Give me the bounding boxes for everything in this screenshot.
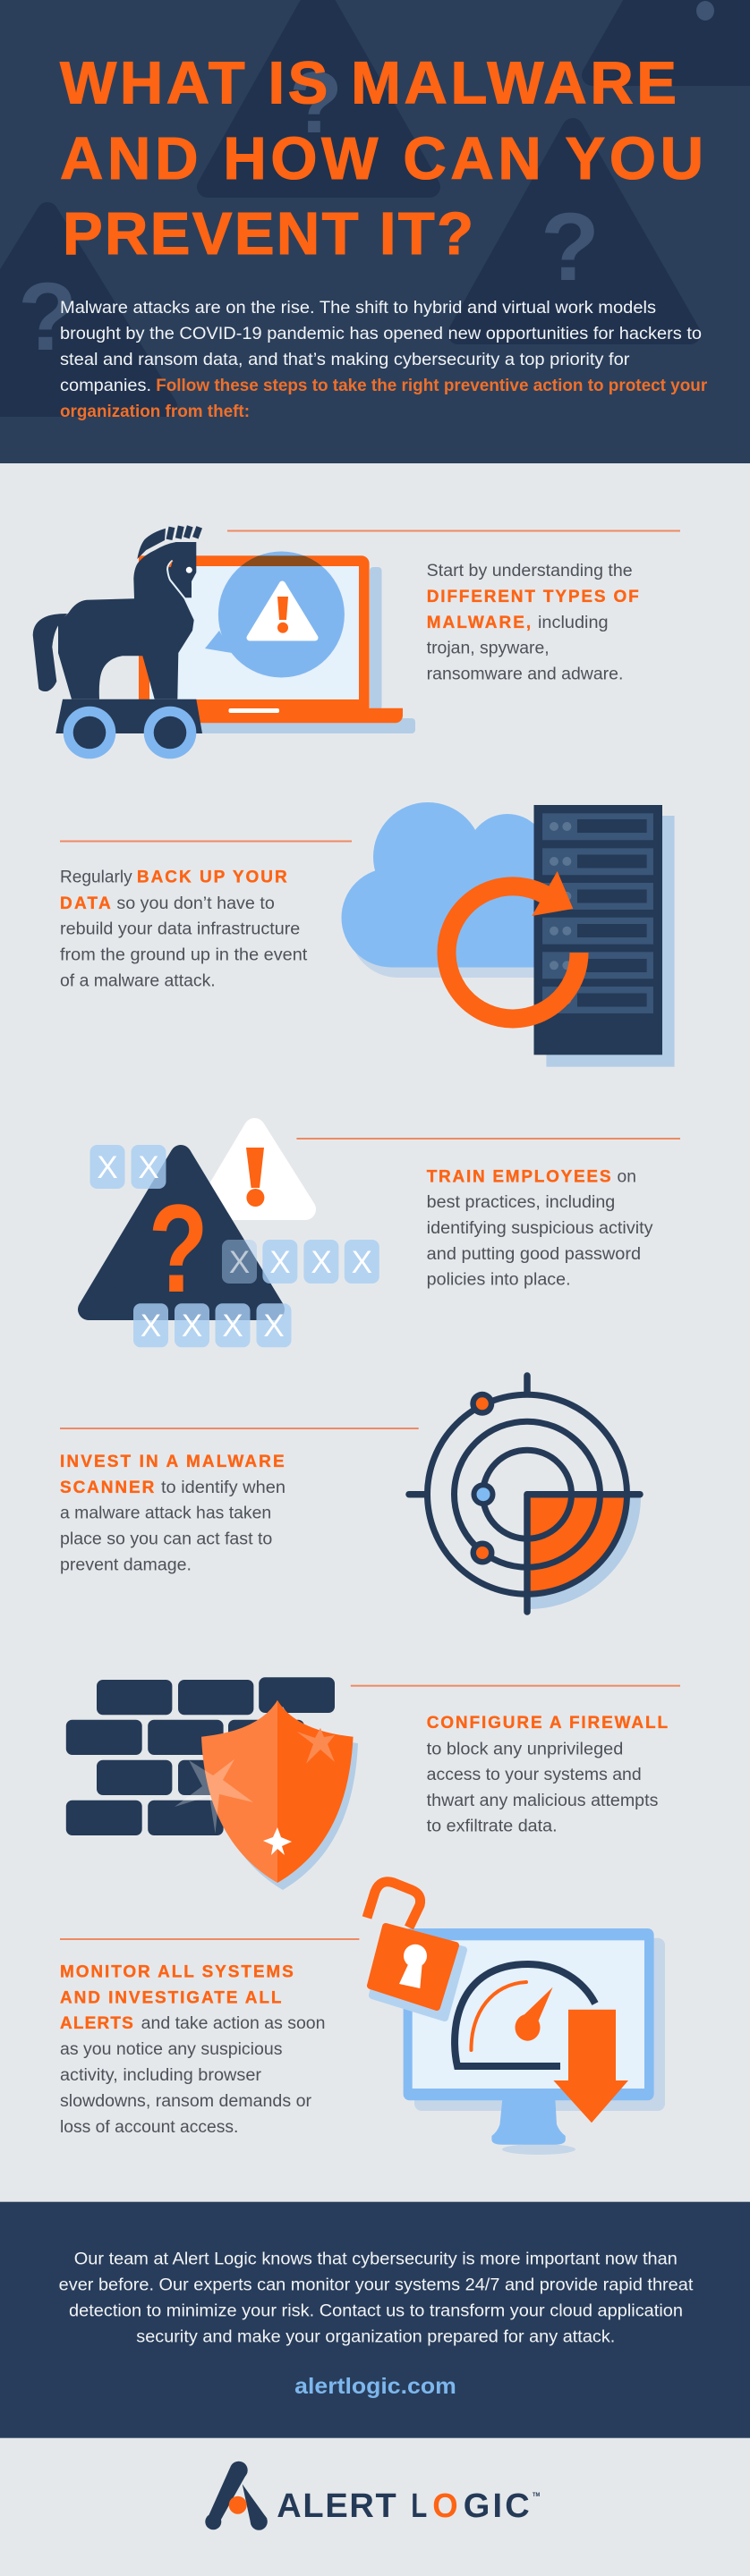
panel: call to action footer band xyxy=(0,2202,750,2438)
text: step 6: loss of account access. xyxy=(60,2118,238,2137)
text: step 3: and putting good password xyxy=(427,1245,641,1264)
icon: warning triangles with password tiles xyxy=(89,1129,379,1347)
text: step 2: DATA xyxy=(60,894,111,913)
text: step 4: prevent damage. xyxy=(60,1556,192,1575)
text: step 6: as you notice any suspicious xyxy=(60,2040,283,2059)
icon: monitor with gauge xyxy=(404,1928,665,2155)
icon: warning triangles with password tiles: X xyxy=(138,1150,159,1185)
title: PREVENT IT? xyxy=(63,200,473,267)
text: step 5 xyxy=(427,1714,668,1836)
panel: step 6 monitor all systems xyxy=(60,1882,665,2155)
logo: Alert Logic xyxy=(205,2462,540,2530)
text: step 4 xyxy=(60,1453,286,1575)
icon: warning triangles with password tiles: X xyxy=(222,1309,243,1343)
panel: header xyxy=(0,0,750,463)
text: closing paragraph: ever before. Our experts can monitor your systems 24/7 and provide rapid threat xyxy=(59,2275,694,2295)
text: step 4: place so you can act fast to xyxy=(60,1530,272,1549)
text: step 1: trojan, spyware, xyxy=(427,640,550,658)
text: step 1 xyxy=(427,562,639,683)
panel: step 5 firewall xyxy=(66,1677,680,1890)
text: step 3: TRAIN EMPLOYEES xyxy=(427,1167,610,1186)
icon: warning triangles with password tiles: X xyxy=(141,1309,161,1343)
panel: step 1 different types of malware xyxy=(33,526,680,758)
text: step 2: BACK UP YOUR xyxy=(137,869,287,887)
title xyxy=(60,50,703,267)
text: step 2 xyxy=(60,869,308,990)
link: alertlogic.com: alertlogic.com xyxy=(294,2374,456,2399)
text: step 6: AND INVESTIGATE ALL xyxy=(60,1988,282,2007)
text: closing paragraph: security and make your organization prepared for any attack. xyxy=(136,2326,615,2346)
text: step 1: ransomware and adware. xyxy=(427,665,623,683)
text: step 4: a malware attack has taken xyxy=(60,1504,271,1523)
icon: warning triangles with password tiles: X xyxy=(182,1309,202,1343)
panel: header: ? xyxy=(18,262,77,370)
text: step 1: Start by understanding the xyxy=(427,562,633,580)
panel: header: ? xyxy=(541,192,600,301)
text: step 3: policies into place. xyxy=(427,1271,571,1290)
icon: server rack xyxy=(533,805,675,1067)
text: step 5: access to your systems and xyxy=(427,1766,642,1784)
text: step 6: activity, including browser xyxy=(60,2066,262,2085)
text: step 3: on xyxy=(618,1167,636,1186)
text: step 3: identifying suspicious activity xyxy=(427,1219,653,1238)
intro text: brought by the COVID-19 pandemic has opened new opportunities for hackers to xyxy=(60,324,702,343)
text: step 3 xyxy=(427,1167,653,1290)
panel: step 4 malware scanner xyxy=(60,1376,641,1612)
text: closing paragraph: Our team at Alert Logic knows that cybersecurity is more important now than xyxy=(74,2250,678,2269)
icon: warning triangles with password tiles: X xyxy=(352,1245,372,1280)
panel: step 3 train employees xyxy=(89,1129,680,1347)
panel: header: ? xyxy=(289,54,343,151)
icon: trojan horse xyxy=(33,526,202,758)
icon: cloud xyxy=(342,802,548,978)
text: step 4: SCANNER xyxy=(60,1479,155,1497)
text: step 5: thwart any malicious attempts xyxy=(427,1792,658,1810)
icon: backup arrow xyxy=(447,871,579,1019)
text: step 5: CONFIGURE A FIREWALL xyxy=(427,1714,668,1733)
logo: Alert Logic: GIC xyxy=(464,2487,530,2525)
icon: open padlock xyxy=(367,1882,464,2018)
text: step 4: to identify when xyxy=(161,1479,286,1497)
logo: Alert Logic: TM xyxy=(533,2493,540,2498)
logo: Alert Logic: ALERT xyxy=(277,2487,396,2525)
icon: brick wall xyxy=(66,1677,335,1835)
text: step 6: and take action as soon xyxy=(141,2014,326,2033)
icon: warning triangles with password tiles: X xyxy=(269,1245,291,1280)
text: step 4: INVEST IN A MALWARE xyxy=(60,1453,285,1471)
text: step 2: rebuild your data infrastructure xyxy=(60,920,300,939)
text: step 6: MONITOR ALL SYSTEMS xyxy=(60,1962,294,1981)
icon: warning triangles with password tiles: X xyxy=(229,1245,250,1280)
text: step 2: so you don’t have to xyxy=(116,894,275,913)
text: step 6 xyxy=(60,1962,326,2137)
intro text: companies. xyxy=(60,376,151,395)
title: WHAT IS MALWARE xyxy=(60,50,677,116)
text: step 2: Regularly xyxy=(60,869,132,887)
intro text: Follow these steps to take the right preventive action to protect your xyxy=(156,376,708,395)
text: closing paragraph xyxy=(59,2250,694,2346)
text: step 1: DIFFERENT TYPES OF xyxy=(427,588,639,606)
text: step 2: from the ground up in the event xyxy=(60,946,308,965)
text: step 1: including xyxy=(538,614,609,632)
text: step 6: ALERTS xyxy=(60,2014,133,2033)
text: step 2: of a malware attack. xyxy=(60,971,216,990)
text: step 5: to block any unprivileged xyxy=(427,1740,623,1758)
icon: laptop with warning bubble xyxy=(139,551,415,733)
intro text: Malware attacks are on the rise. The shift to hybrid and virtual work models xyxy=(60,298,656,318)
icon: warning triangles with password tiles: X xyxy=(263,1309,285,1343)
intro text: steal and ransom data, and that’s making cybersecurity a top priority for xyxy=(60,350,630,369)
icon: warning triangles with password tiles: X xyxy=(97,1150,118,1185)
icon: radar xyxy=(409,1376,641,1612)
text: step 6: slowdowns, ransom demands or xyxy=(60,2092,312,2111)
text: step 5: to exfiltrate data. xyxy=(427,1818,558,1836)
text: closing paragraph: detection to minimize your risk. Contact us to transform your cloud application xyxy=(69,2301,683,2320)
logo: Alert Logic: L xyxy=(411,2487,427,2525)
icon: shield xyxy=(175,1700,358,1890)
text: step 1: MALWARE, xyxy=(427,614,531,632)
title: AND HOW CAN YOU xyxy=(60,125,703,192)
text: step 3: best practices, including xyxy=(427,1193,615,1212)
logo: Alert Logic: O xyxy=(432,2487,458,2525)
intro text xyxy=(60,298,708,421)
icon: warning triangles with password tiles: X xyxy=(311,1245,332,1280)
panel: step 2 back up your data xyxy=(60,802,675,1067)
icon: warning triangles with password tiles: ? xyxy=(149,1178,209,1318)
intro text: organization from theft: xyxy=(60,402,250,421)
